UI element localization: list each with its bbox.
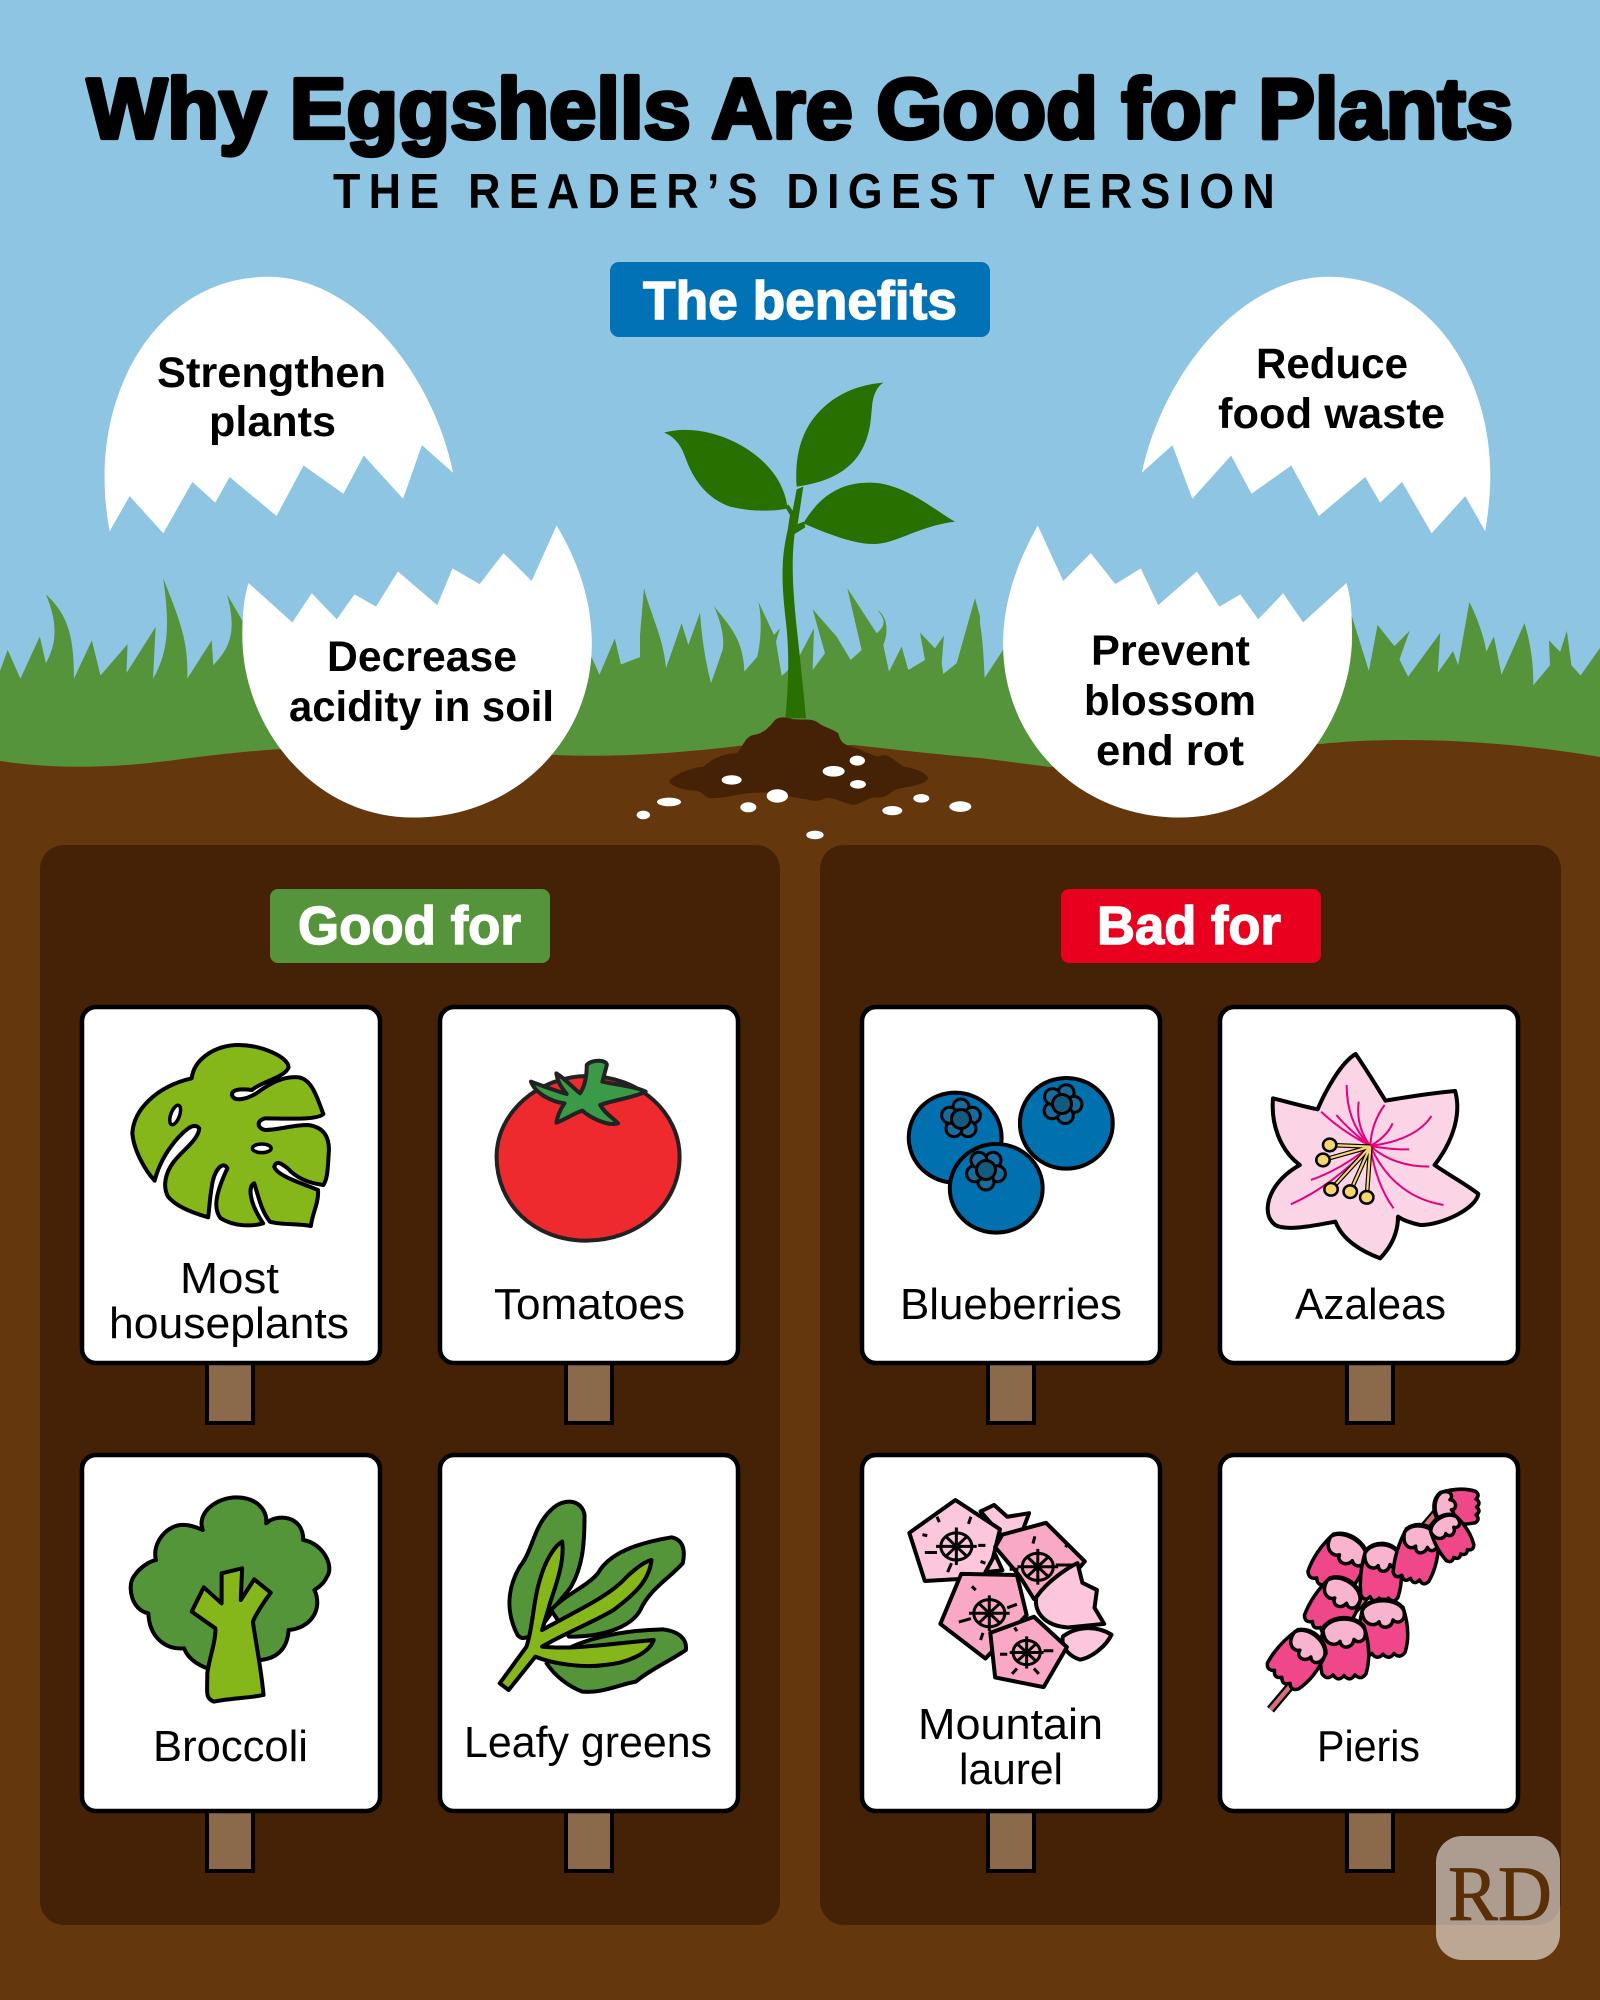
sign: broccoli [82,1455,380,1871]
sign: most houseplants [82,1007,380,1423]
egg shell: reduce food waste: Reduce [1256,340,1408,388]
sign: tomatoes [440,1007,738,1423]
egg shell: prevent blossom end rot [1003,526,1352,818]
icon: blueberries [909,1078,1113,1233]
subtitle: THE READER’S DIGEST VERSION [333,165,1283,219]
icon: pieris blossoms [1263,1489,1479,1710]
egg shell: decrease acidity in soil [242,526,592,818]
grass centre [640,588,980,770]
ground: grass and soil [0,578,1600,2000]
sign: mountain laurel [862,1455,1160,1871]
egg shell: prevent blossom end rot: end rot [1096,727,1244,775]
sign: most houseplants: Most [180,1254,279,1303]
sign: leafy greens: Leafy greens [464,1718,712,1767]
sign: tomatoes: Tomatoes [494,1280,685,1329]
icon: mountain laurel flowers [909,1500,1111,1687]
sign: pieris [1220,1455,1518,1871]
egg shell: decrease acidity in soil: Decrease [327,633,517,681]
egg shell: strengthen plants: Strengthen [157,349,386,397]
egg shell: strengthen plants: plants [209,398,336,446]
RD logo: RD [1448,1850,1552,1937]
seedling with soil mound and eggshell bits [637,383,971,839]
badge: the benefits [610,262,990,337]
egg shell: reduce food waste [1142,277,1490,533]
badge: good for: Good for [298,896,521,956]
badge: bad for: Bad for [1097,896,1281,956]
egg shell: prevent blossom end rot: Prevent [1091,627,1250,675]
RD logo [1436,1836,1560,1960]
title: Why Eggshells Are Good for Plants [87,62,1513,157]
grass left [0,578,644,805]
sign: azaleas [1220,1007,1518,1423]
badge: bad for [1061,889,1321,963]
badge: the benefits: The benefits [643,271,957,331]
sign: most houseplants: houseplants [109,1299,349,1348]
icon: azalea flower [1268,1054,1478,1258]
egg shell: prevent blossom end rot: blossom [1084,677,1256,725]
icon: monstera leaf [132,1045,329,1226]
icon: broccoli [131,1497,329,1702]
sign: mountain laurel: laurel [959,1745,1063,1794]
sign: azaleas: Azaleas [1295,1280,1446,1329]
sign: blueberries [862,1007,1160,1423]
panel: bad for [820,845,1561,1925]
egg shell: decrease acidity in soil: acidity in soil [289,683,554,731]
sign: pieris: Pieris [1317,1722,1420,1771]
soil [0,740,1600,2000]
grass right [975,598,1600,805]
sign: broccoli: Broccoli [153,1722,308,1771]
sign: mountain laurel: Mountain [918,1700,1103,1749]
panel: good for [40,845,780,1925]
icon: leafy greens [500,1502,686,1692]
sign: blueberries: Blueberries [900,1280,1122,1329]
egg shell: strengthen plants [105,277,453,533]
sign: leafy greens [440,1455,738,1871]
egg shell: reduce food waste: food waste [1218,390,1445,438]
icon: tomato [497,1061,680,1241]
badge: good for [270,889,550,963]
